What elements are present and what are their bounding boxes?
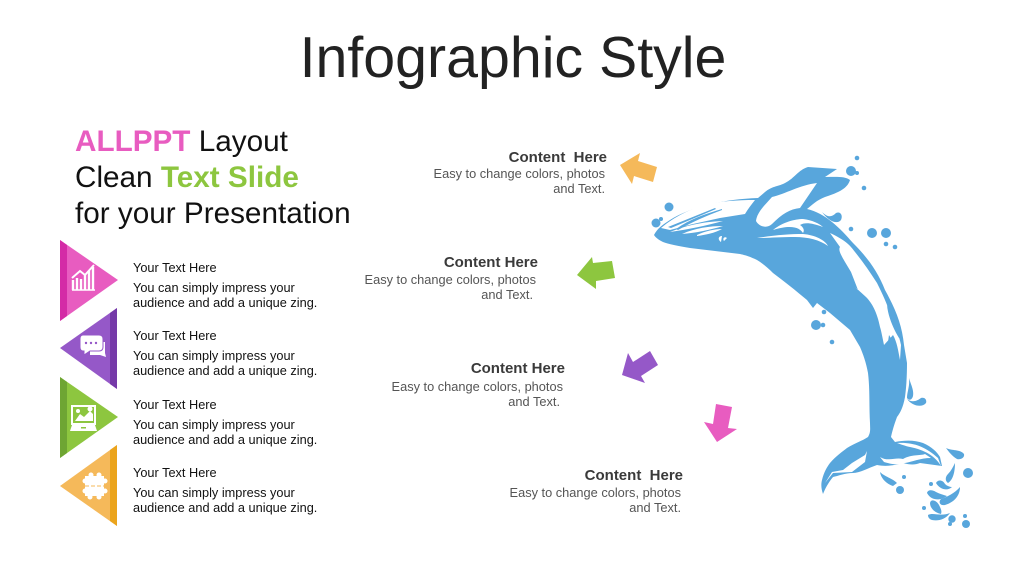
left text block 1: Your Text Here	[133, 260, 217, 275]
left text block 3: You can simply impress your	[133, 417, 295, 432]
left text block 1: You can simply impress your	[133, 280, 295, 295]
triangle icon: pink chart	[60, 240, 118, 321]
arrow: orange	[620, 153, 657, 184]
subtitle heading: for your Presentation	[75, 197, 351, 230]
content text: orange: Easy to change colors, photos	[434, 166, 605, 181]
content text: green: Content Here	[444, 254, 538, 271]
content text: green: and Text.	[481, 287, 533, 302]
content text: pink: Easy to change colors, photos	[510, 485, 681, 500]
water droplets	[652, 156, 973, 528]
arrow: pink	[704, 404, 737, 442]
content text: purple: Content Here	[471, 360, 565, 377]
triangle icon: orange puzzle	[60, 445, 117, 526]
content text: orange	[434, 149, 607, 196]
left text block 3	[133, 397, 317, 447]
content text: green	[365, 254, 538, 302]
content text: orange: and Text.	[553, 181, 605, 196]
left text block 4: audience and add a unique zing.	[133, 500, 317, 515]
whale white areas	[661, 183, 941, 483]
content text: pink: and Text.	[629, 500, 681, 515]
left text block 3: Your Text Here	[133, 397, 217, 412]
arrow: green	[577, 257, 615, 289]
left text block 1	[133, 260, 317, 310]
whale inner streaks	[668, 208, 722, 230]
content text: orange: Content Here	[509, 149, 607, 166]
left text block 4: You can simply impress your	[133, 485, 295, 500]
triangle icon: green laptop	[60, 377, 118, 458]
whale illustration	[654, 167, 942, 494]
left text block 2	[133, 328, 317, 378]
content text: pink	[510, 467, 683, 515]
left text block 3: audience and add a unique zing.	[133, 432, 317, 447]
arrow: purple	[622, 351, 658, 383]
content text: purple: Easy to change colors, photos	[392, 379, 563, 394]
triangle icon: purple chat	[60, 308, 117, 389]
title: Infographic Style	[300, 26, 726, 90]
content text: green: Easy to change colors, photos	[365, 272, 536, 287]
content text: purple	[392, 360, 565, 409]
content text: pink: Content Here	[585, 467, 683, 484]
left text block 2: You can simply impress your	[133, 348, 295, 363]
content text: purple: and Text.	[508, 394, 560, 409]
subtitle heading: ALLPPT Layout	[75, 125, 288, 158]
left text block 4: Your Text Here	[133, 465, 217, 480]
left text block 1: audience and add a unique zing.	[133, 295, 317, 310]
subtitle heading	[75, 125, 351, 230]
left text block 2: Your Text Here	[133, 328, 217, 343]
left text block 2: audience and add a unique zing.	[133, 363, 317, 378]
subtitle heading: Clean Text Slide	[75, 161, 299, 194]
left text block 4	[133, 465, 317, 515]
